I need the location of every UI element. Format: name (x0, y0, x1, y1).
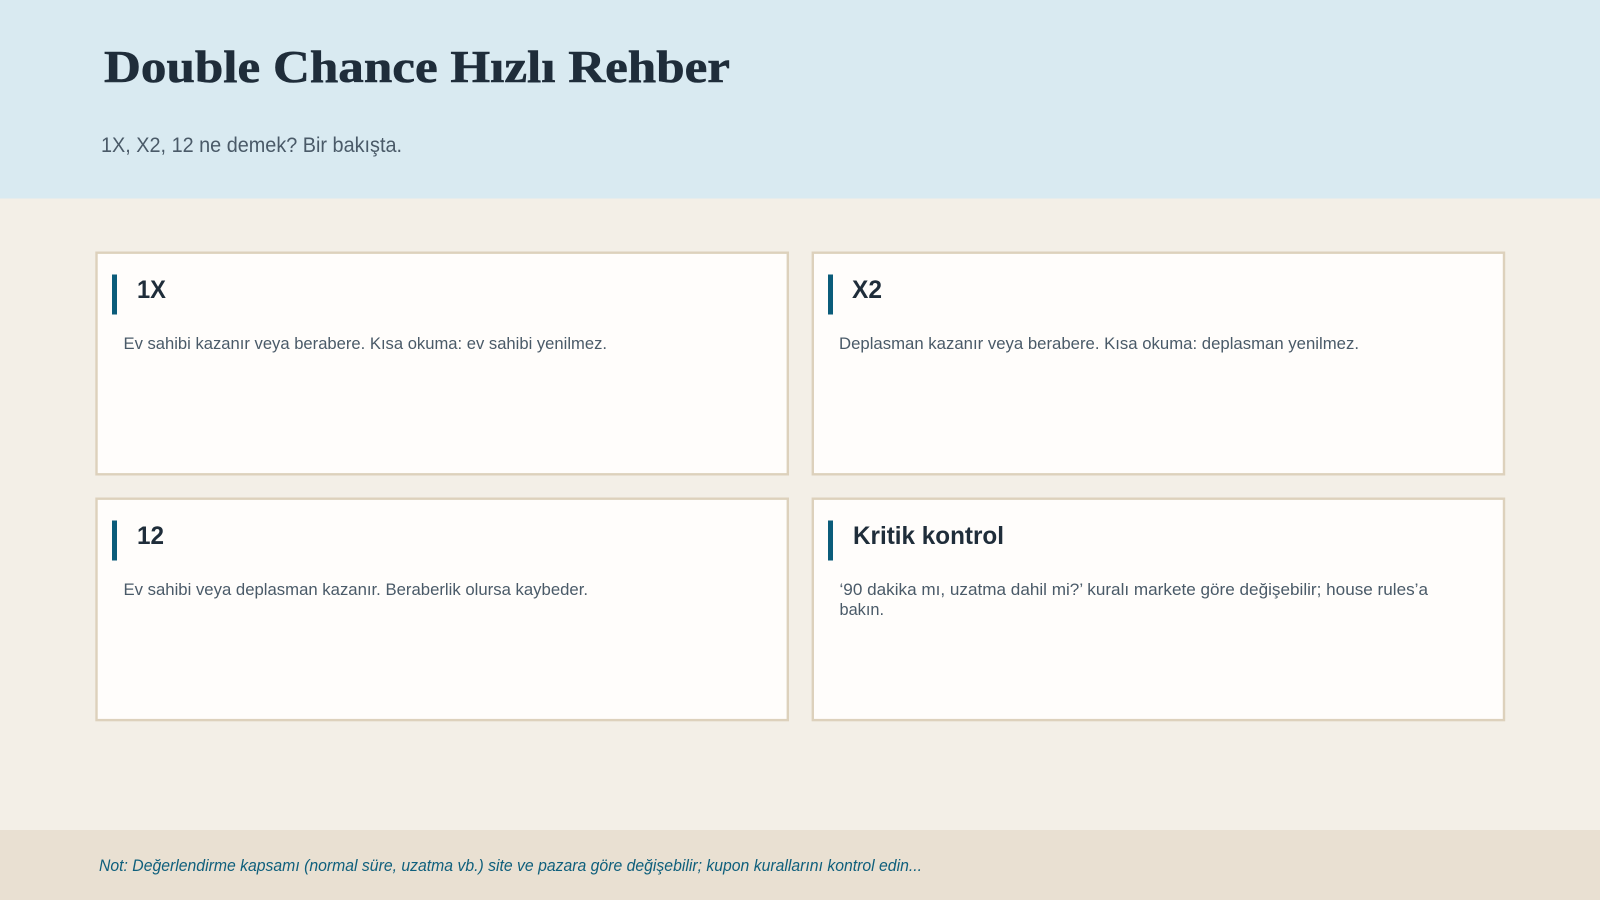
heading: 1X: 1X (137, 276, 166, 304)
footer note: Not: Değerlendirme kapsamı (normal süre, uzatma vb.) site ve pazara göre değişebilir; kupon kurallarını kontrol edin... (99, 857, 922, 875)
text: Kritik kontrol description: bakın. (840, 601, 884, 619)
subtitle: 1X, X2, 12 ne demek? Bir bakışta. (101, 134, 402, 157)
accent bar: 12 (112, 520, 117, 560)
text: 1X description: Ev sahibi kazanır veya berabere. Kısa okuma: ev sahibi yenilmez. (124, 335, 607, 353)
heading: 12: 12 (137, 522, 164, 550)
title: Double Chance Hızlı Rehber (104, 41, 730, 92)
panel: 12 (96, 499, 788, 720)
heading: Kritik kontrol: Kritik kontrol (853, 522, 1004, 550)
accent bar: Kritik kontrol (828, 520, 833, 560)
footer band (0, 830, 1600, 900)
text: 12 description: Ev sahibi veya deplasman kazanır. Beraberlik olursa kaybeder. (124, 581, 588, 599)
panel: Kritik kontrol (813, 499, 1504, 720)
heading: X2: X2 (852, 276, 882, 304)
panel: 1X (96, 253, 788, 474)
text: Kritik kontrol description: ‘90 dakika mı, uzatma dahil mi?’ kuralı markete göre değişebilir; house rules’a (840, 581, 1429, 599)
header band (0, 0, 1600, 198)
accent bar: X2 (828, 274, 833, 314)
accent bar: 1X (112, 274, 117, 314)
text: Kritik kontrol description (840, 581, 1429, 619)
text: X2 description: Deplasman kazanır veya berabere. Kısa okuma: deplasman yenilmez. (839, 335, 1359, 353)
panel: X2 (813, 253, 1504, 474)
